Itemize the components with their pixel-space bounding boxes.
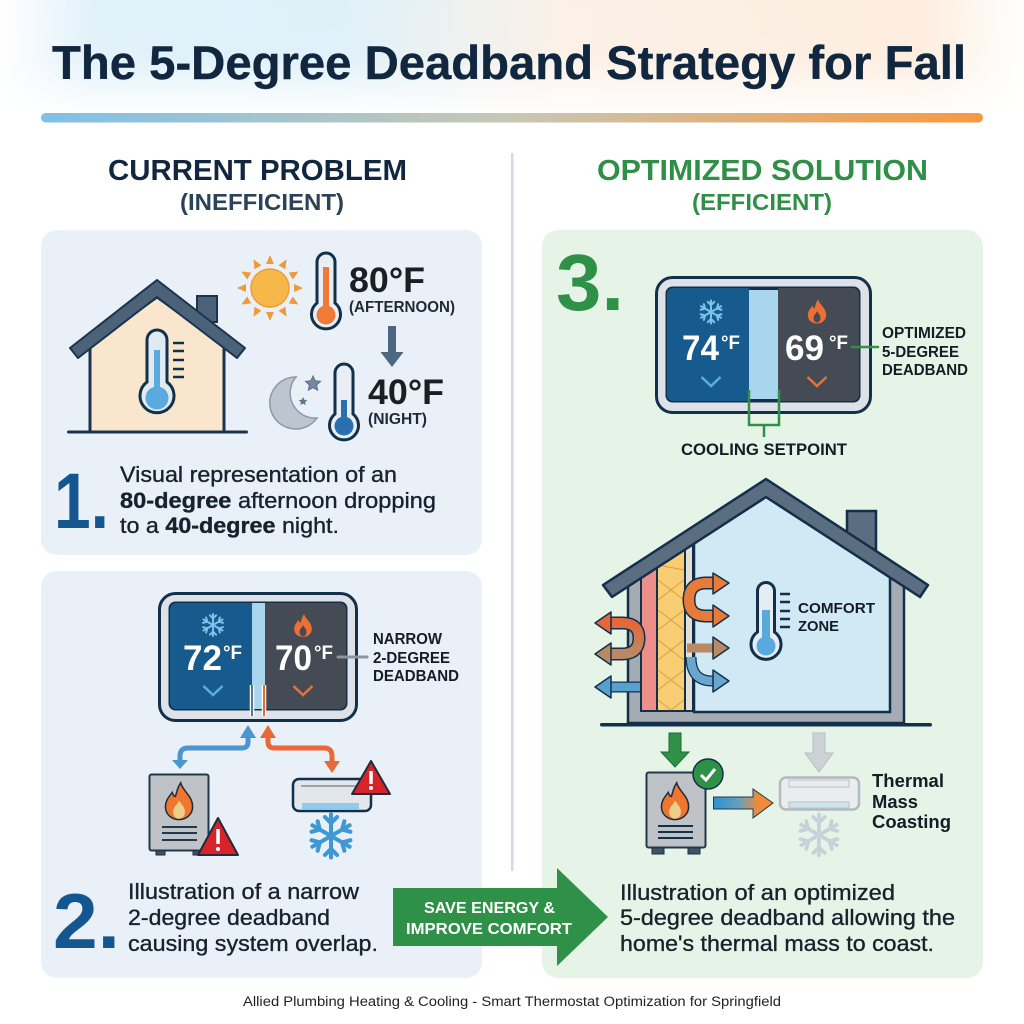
arrow: green into furnace (661, 733, 689, 767)
description 2: Illustration of a narrow (128, 879, 359, 904)
banner arrow: save energy: SAVE ENERGY & (424, 900, 555, 917)
description 1 (120, 462, 436, 538)
icon: furnace with check (646, 759, 723, 854)
panel 2: narrow deadband (41, 571, 482, 978)
panel 1: temperature swing (41, 230, 482, 555)
description 2: causing system overlap. (128, 931, 378, 956)
heading: current problem (108, 155, 407, 215)
arrow: temperature drop (380, 326, 404, 367)
banner arrow: save energy (393, 868, 608, 966)
thermometer: comfort zone (751, 582, 875, 659)
label: thermal mass coasting: Mass (872, 792, 918, 812)
label: thermal mass coasting (872, 771, 951, 832)
label: thermal mass coasting: Coasting (872, 812, 951, 832)
temperature: 80F afternoon: (AFTERNOON) (349, 299, 455, 316)
description 2 (128, 879, 378, 956)
callout: narrow deadband: NARROW (373, 631, 443, 648)
temperature: 40F night: (NIGHT) (368, 411, 427, 428)
callout: optimized deadband: DEADBAND (882, 362, 968, 379)
title gradient bar (41, 113, 983, 122)
description 3: Illustration of an optimized (620, 880, 895, 905)
callout: optimized deadband: OPTIMIZED (882, 325, 966, 342)
icon: idle AC unit (780, 778, 859, 810)
thermostat 74 / 69: 74 (682, 329, 720, 368)
thermostat 72 / 70: °F (223, 643, 242, 664)
description 3: home's thermal mass to coast. (620, 931, 934, 956)
thermostat 72 / 70: 70 (275, 639, 312, 678)
step number 1: 1. (54, 456, 109, 545)
thermostat 74 / 69: °F (721, 333, 740, 354)
description 1: 80-degree afternoon dropping (120, 488, 436, 513)
icon: house with thermometer (67, 280, 248, 434)
thermostat 74 / 69: 69 (785, 329, 824, 368)
bracket: cooling setpoint (681, 390, 848, 459)
callout: optimized deadband: 5-DEGREE (882, 344, 959, 361)
heading: current problem: CURRENT PROBLEM (108, 155, 407, 187)
arrow: orange to AC (260, 725, 340, 773)
heading: optimized solution (597, 155, 928, 215)
heading: optimized solution: (EFFICIENT) (692, 189, 832, 215)
description 1: Visual representation of an (120, 462, 397, 487)
arrow: blue to furnace (172, 725, 256, 769)
thermostat 74 / 69 (656, 278, 870, 412)
title: The 5-Degree Deadband Strategy for Fall (52, 36, 966, 89)
icon: hot thermometer (312, 253, 340, 329)
heading: current problem: (INEFFICIENT) (180, 189, 344, 215)
arrow: furnace to AC gradient (714, 789, 773, 818)
description 3 (620, 880, 955, 956)
temperature: 80F afternoon (349, 261, 455, 316)
callout: narrow deadband (338, 631, 459, 685)
house cross-section (600, 479, 932, 726)
bracket: cooling setpoint: COOLING SETPOINT (681, 440, 848, 459)
icon: snowflake (309, 814, 353, 858)
temperature: 40F night (368, 373, 444, 428)
arrow: grey to AC (805, 733, 833, 772)
step number 3: 3. (556, 238, 624, 327)
icon: pale snowflake (798, 814, 840, 856)
callout: optimized deadband (852, 325, 968, 379)
icon: cold thermometer (330, 364, 358, 440)
thermostat 72 / 70: °F (314, 643, 333, 664)
temperature: 40F night: 40°F (368, 373, 444, 412)
description 2: 2-degree deadband (128, 905, 330, 930)
description 3: 5-degree deadband allowing the (620, 905, 955, 930)
icon: moon and stars (270, 376, 320, 429)
footer: Allied Plumbing Heating & Cooling - Smart Thermostat Optimization for Springfield (243, 994, 781, 1009)
thermometer: comfort zone: ZONE (798, 618, 839, 635)
thermostat 72 / 70: 72 (183, 639, 222, 678)
callout: narrow deadband: 2-DEGREE (373, 650, 450, 667)
thermostat 74 / 69: °F (829, 333, 848, 354)
icon: AC unit with warning (293, 761, 390, 811)
label: thermal mass coasting: Thermal (872, 771, 944, 791)
icon: furnace with warning (150, 774, 238, 855)
description 1: to a 40-degree night. (120, 513, 339, 538)
heat flow arrows (595, 573, 729, 698)
step number 2: 2. (53, 877, 120, 965)
thermostat 72 / 70 (160, 594, 356, 720)
banner arrow: save energy: IMPROVE COMFORT (406, 921, 572, 938)
thermometer: comfort zone: COMFORT (798, 600, 875, 617)
heading: optimized solution: OPTIMIZED SOLUTION (597, 155, 928, 187)
icon: sun (237, 255, 303, 321)
temperature: 80F afternoon: 80°F (349, 261, 425, 300)
header gradient wash (0, 0, 1024, 116)
panel 3: optimized solution (542, 230, 983, 978)
callout: narrow deadband: DEADBAND (373, 668, 459, 685)
